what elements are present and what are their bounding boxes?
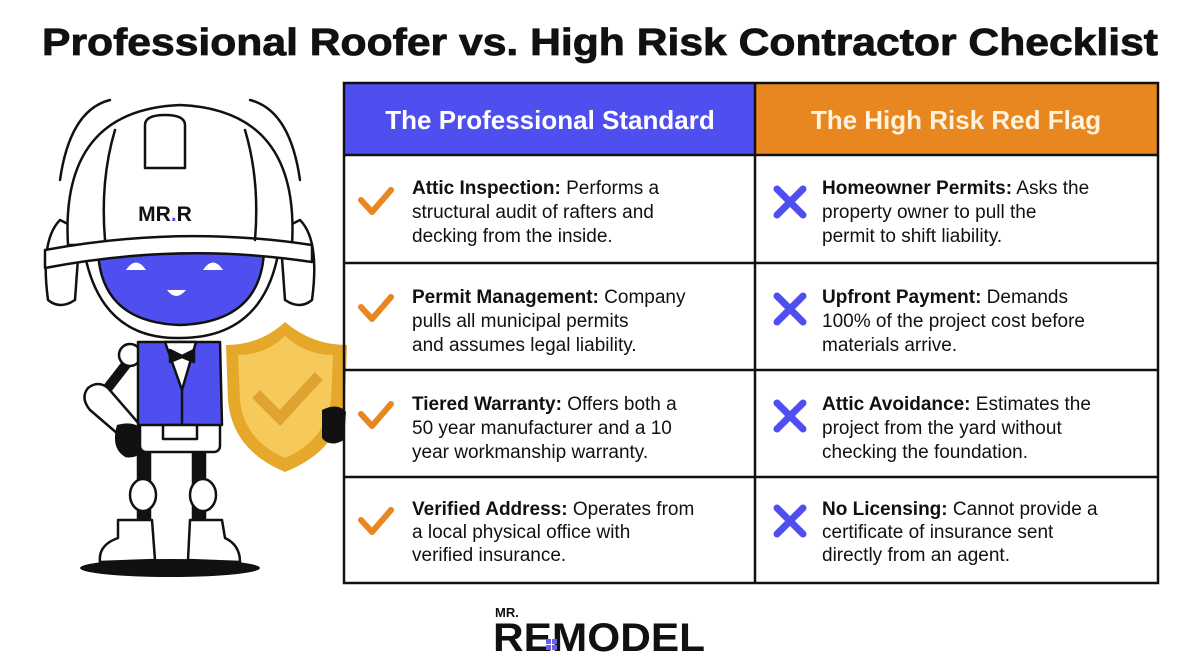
header: professional	[344, 83, 755, 155]
table: materials arrive.	[822, 335, 957, 356]
robot head	[80, 200, 282, 338]
table: checking the foundation.	[822, 442, 1028, 463]
table: and assumes legal liability.	[412, 335, 637, 356]
title: Professional Roofer vs. High Risk Contractor Checklist	[42, 22, 1158, 64]
table: a local physical office with	[412, 522, 630, 543]
table: decking from the inside.	[412, 226, 613, 247]
table: year workmanship warranty.	[412, 442, 648, 463]
robot helmet	[45, 105, 312, 268]
table: structural audit of rafters and	[412, 202, 654, 223]
row 4 right: No Licensing: Cannot provide a	[822, 499, 1098, 520]
icon: shield	[226, 322, 347, 472]
icons: checks	[361, 190, 391, 532]
table: 100% of the project cost before	[822, 311, 1085, 332]
row 2 right: Upfront Payment: Demands	[822, 287, 1068, 308]
robot mascot	[45, 100, 314, 577]
row 1 left: Attic Inspection: Performs a	[412, 178, 659, 199]
table: certificate of insurance sent	[822, 522, 1054, 543]
robot shadow	[80, 559, 260, 577]
row 3 left: Tiered Warranty: Offers both a	[412, 394, 677, 415]
table: The Professional Standard	[385, 105, 715, 135]
table: 50 year manufacturer and a 10	[412, 418, 672, 439]
header: red flag	[755, 83, 1158, 155]
robot earmuffs	[46, 100, 314, 305]
table: The High Risk Red Flag	[811, 105, 1101, 135]
robot body / vest	[138, 342, 222, 452]
logo: MR.	[495, 605, 519, 620]
table: pulls all municipal permits	[412, 311, 628, 332]
table: verified insurance.	[412, 545, 566, 566]
row 2 left: Permit Management: Company	[412, 287, 686, 308]
table: directly from an agent.	[822, 545, 1010, 566]
table: project from the yard without	[822, 418, 1062, 439]
robot arm left	[84, 344, 146, 456]
row 3 right: Attic Avoidance: Estimates the	[822, 394, 1091, 415]
table	[344, 83, 1158, 583]
robot legs	[138, 450, 205, 560]
table: permit to shift liability.	[822, 226, 1002, 247]
row 1 right: Homeowner Permits: Asks the	[822, 178, 1089, 199]
logo: REMODEL	[493, 616, 705, 660]
row 4 left: Verified Address: Operates from	[412, 499, 694, 520]
helmet label: MR.R	[138, 203, 192, 226]
icons: crosses	[777, 189, 803, 534]
table: property owner to pull the	[822, 202, 1036, 223]
